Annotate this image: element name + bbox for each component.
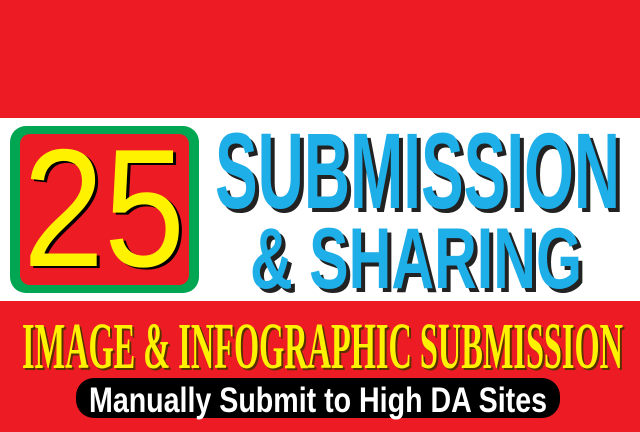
badge: 25: 25 — [26, 116, 188, 304]
pill: Manually Submit to High DA Sites: Manually Submit to High DA Sites — [89, 381, 547, 420]
badge: 25: 25 — [23, 114, 185, 302]
top red band — [0, 0, 640, 118]
bottom red band — [0, 301, 640, 432]
